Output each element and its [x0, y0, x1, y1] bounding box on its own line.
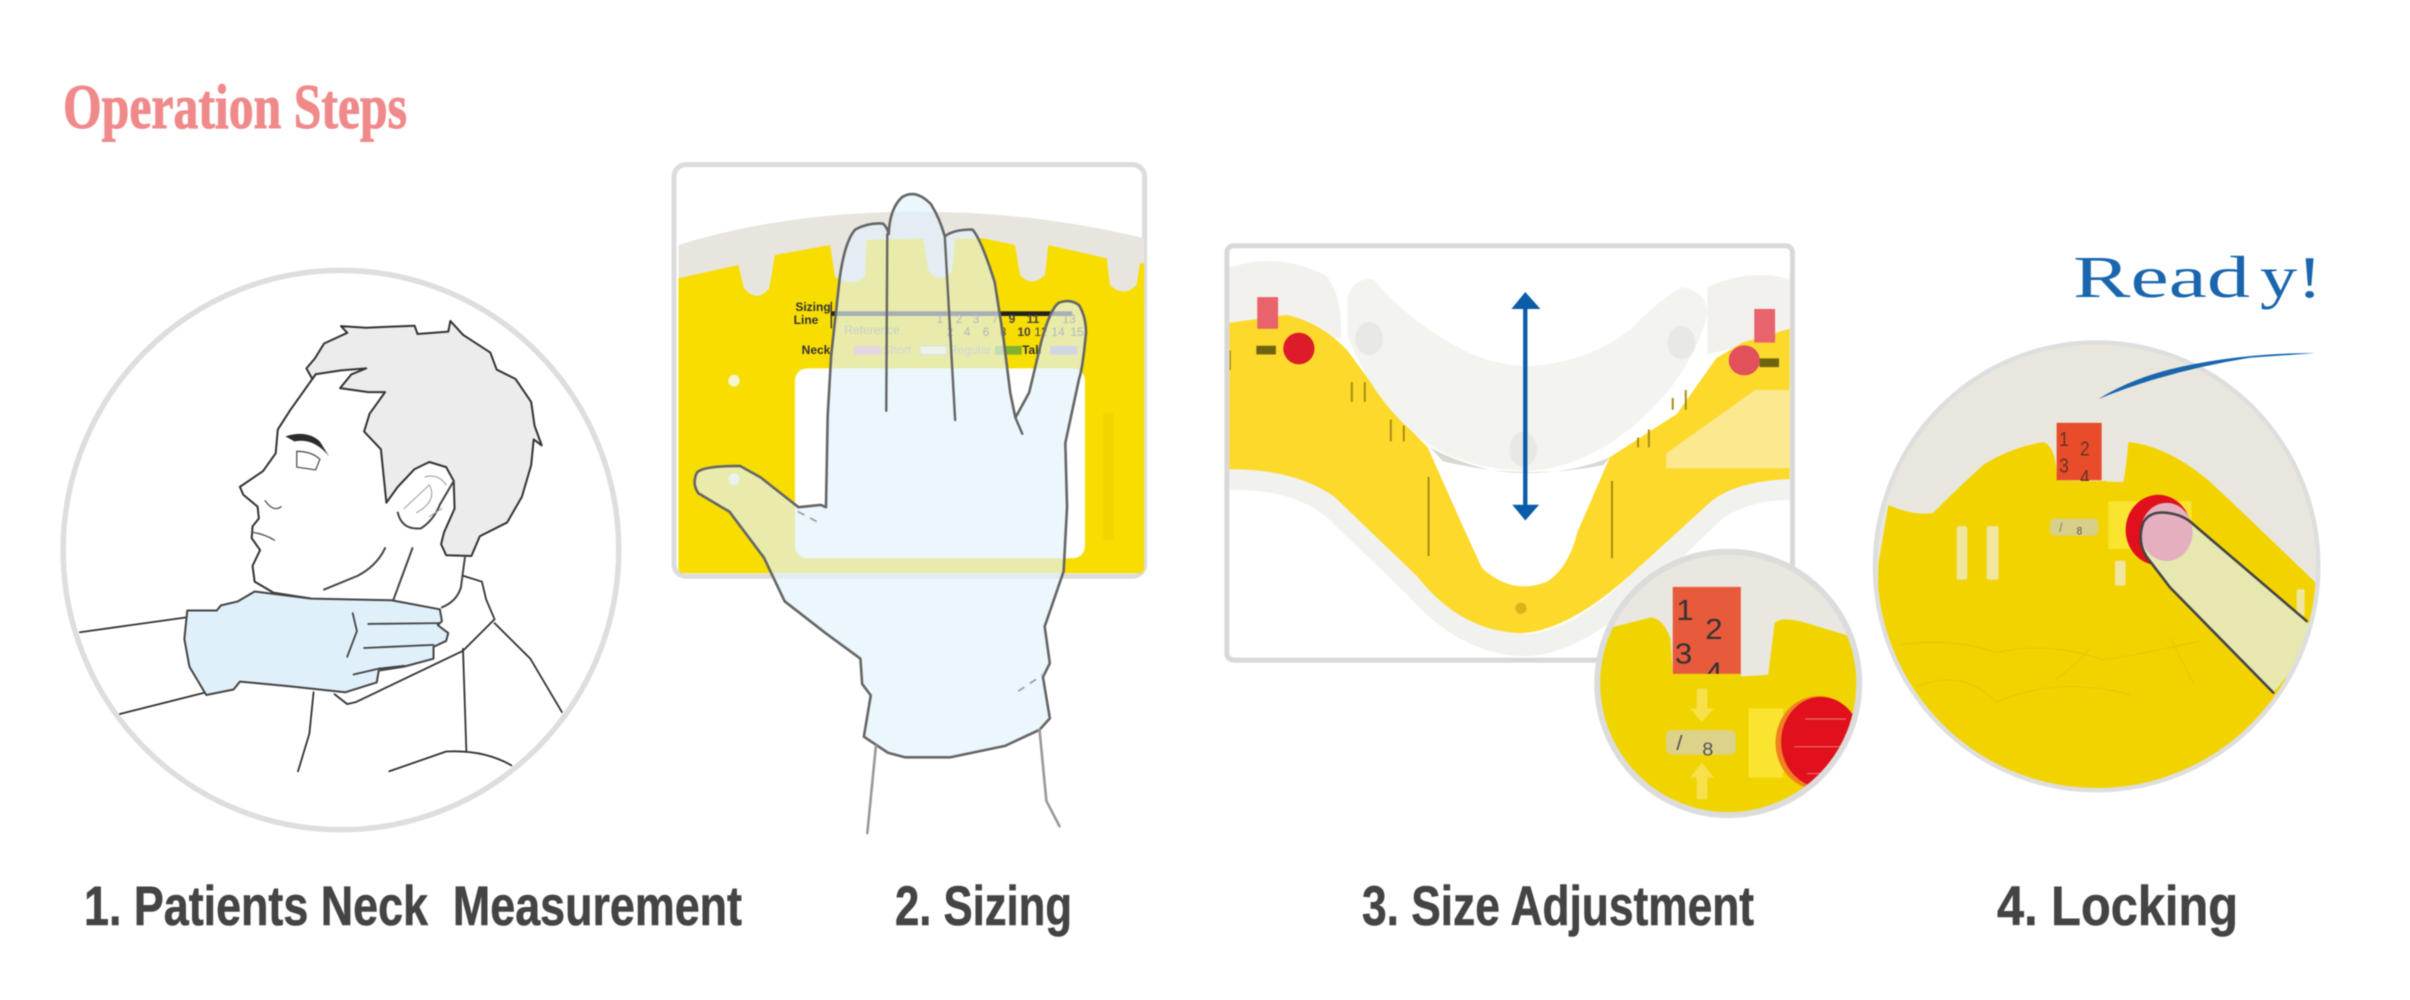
- sizing legend text: 8: [1000, 325, 1007, 339]
- illustration: patient head: [240, 321, 542, 607]
- sizing legend text: 4: [964, 325, 971, 339]
- title: Operation Steps: [63, 71, 407, 142]
- sizing legend text: Line: [794, 313, 819, 327]
- sizing legend text: 2: [956, 312, 963, 326]
- circle frame: [1875, 342, 2318, 790]
- sizing legend text: Short: [883, 343, 912, 357]
- locking close-up photo: 1: [2059, 428, 2069, 450]
- inset: size indicator close-up: 8: [1702, 740, 1713, 760]
- ready callout: [2073, 244, 2322, 310]
- locking close-up photo: 2: [2080, 437, 2090, 460]
- label: step 1: 1. Patients Neck Measurement: [84, 874, 742, 937]
- label: step 2: 2. Sizing: [895, 874, 1072, 937]
- sizing legend text: 10: [1017, 325, 1031, 339]
- sizing legend text: Neck: [802, 343, 831, 357]
- sizing collar photo: [674, 165, 1145, 576]
- illustration: collar and shoulders: [80, 576, 562, 771]
- step labels: [84, 874, 2238, 937]
- sizing legend text: 6: [983, 325, 990, 339]
- locking close-up photo: 8: [2077, 525, 2082, 538]
- sizing legend text: Tall: [1022, 343, 1042, 357]
- locking close-up photo: [1870, 339, 2327, 798]
- sizing legend text: 15: [1070, 325, 1084, 339]
- collar photo: [1229, 261, 1790, 645]
- panel: step 4 locking: [1870, 339, 2327, 798]
- label: step 4: 4. Locking: [1997, 874, 2238, 937]
- inset: size indicator close-up: 2: [1705, 614, 1723, 646]
- label: step 3: 3. Size Adjustment: [1362, 874, 1754, 937]
- inset: size indicator close-up: /: [1676, 731, 1682, 755]
- inset: size indicator close-up: 3: [1675, 639, 1692, 670]
- panel: step 2 sizing: [674, 165, 1145, 833]
- locking close-up photo: /: [2059, 520, 2063, 535]
- sizing legend text: 2: [947, 325, 954, 339]
- swoosh under ready text: [2098, 353, 2315, 399]
- panel: step 1 neck measurement: [63, 270, 619, 830]
- locking close-up photo: 3: [2059, 454, 2069, 477]
- inset: size indicator close-up: 4: [1705, 658, 1723, 689]
- illustration: gloved hand over collar: [695, 194, 1086, 833]
- sizing legend text: Reference: [844, 323, 900, 337]
- inset: size indicator close-up: [1590, 548, 1868, 821]
- sizing legend text: 3: [973, 312, 980, 326]
- inset: size indicator close-up: 1: [1676, 595, 1694, 627]
- collar frame: [1227, 246, 1792, 660]
- sizing legend text: [794, 300, 1084, 357]
- sizing legend text: Regular: [949, 343, 991, 357]
- sizing legend text: 11: [1027, 312, 1040, 326]
- sizing legend text: 13: [1062, 312, 1076, 326]
- sizing legend text: 1: [937, 312, 944, 326]
- sizing legend text: 12: [1034, 325, 1048, 339]
- ready callout: Read: [2073, 244, 2250, 310]
- ready callout: y!: [2260, 244, 2322, 310]
- sizing legend text: 7: [992, 312, 999, 326]
- sizing legend text: Sizing: [795, 300, 831, 314]
- illustration: gloved hand: [184, 592, 448, 695]
- sizing legend text: 9: [1009, 312, 1016, 326]
- arrow: vertical adjustment: [1511, 292, 1540, 521]
- sizing legend text: 14: [1051, 325, 1065, 339]
- panel: step 3 size adjustment: [1227, 246, 1868, 821]
- circle frame: [63, 270, 619, 830]
- locking close-up photo: 4: [2080, 466, 2090, 488]
